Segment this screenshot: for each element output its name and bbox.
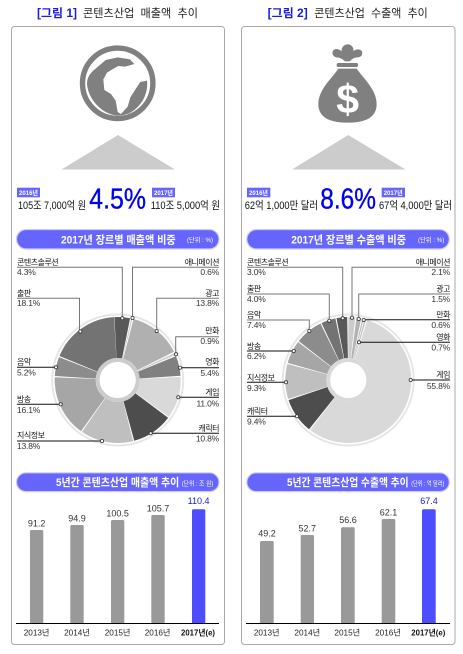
callout: broadcasting (17, 394, 62, 415)
bar chart: five year sales (16, 496, 219, 637)
heading pill: five year exports: 5년간 콘텐츠산업 수출액 추이 (287, 475, 409, 489)
callout: music (17, 356, 58, 378)
stat: 8.6%: 8.6% (320, 183, 376, 215)
callout: film: 0.7% (431, 343, 451, 353)
bar chart: five year sales: 2016년 (145, 627, 170, 637)
heading: figure 1: [그림 1] (37, 7, 77, 20)
heading: figure 1 (37, 7, 198, 20)
badge: 2017 (152, 188, 175, 197)
callout: publishing (17, 288, 82, 333)
callout: knowledge information: 9.3% (247, 383, 266, 393)
badge: 2016: 2016년 (249, 188, 268, 197)
callout: character: 10.8% (196, 433, 220, 443)
bar chart: five year exports: 67.4 (420, 496, 438, 506)
callout: content solution (247, 257, 344, 320)
callout: comics (362, 310, 451, 330)
badge: 2017: 2017년 (154, 188, 173, 197)
callout: film: 영화 (205, 356, 220, 366)
callout: games: 게임 (436, 370, 450, 380)
heading pill: five year exports: (단위 : 억 달러) (411, 478, 444, 487)
callout: broadcasting (247, 341, 295, 361)
callout: animation: 애니메이션 (185, 257, 219, 267)
heading pill: genre sales share: (단위 : %) (187, 235, 213, 244)
bar chart: five year sales: 2013년 (24, 627, 49, 637)
callout: advertising: 광고 (436, 284, 450, 294)
chart: export donut (283, 314, 414, 446)
callout: publishing: 18.1% (17, 298, 41, 308)
callout: animation: 0.6% (200, 267, 220, 277)
bar chart: five year exports: 2014년 (294, 627, 320, 637)
callout: content solution (17, 257, 124, 320)
callout: animation: 애니메이션 (416, 257, 450, 267)
text: 2016 exports: 62억 1,000만 달러 (245, 199, 318, 212)
chart: sales donut (52, 314, 183, 446)
callout: advertising (357, 284, 451, 321)
stat: 4.5%: 4.5% (89, 183, 146, 215)
callout: advertising: 광고 (205, 288, 219, 298)
text: 2016 sales: 105조 7,000억 원 (18, 199, 86, 212)
bar chart: five year sales: 94.9 (68, 514, 86, 524)
icon: money bag: $ (336, 76, 359, 122)
bar chart: five year exports: 49.2 (258, 528, 276, 538)
callout: content solution: 3.0% (247, 267, 266, 277)
heading pill: genre export share: (단위 : %) (418, 235, 444, 244)
bar chart: five year exports: 2013년 (254, 627, 280, 637)
callout: film: 5.4% (200, 368, 220, 378)
heading pill: genre export share (247, 230, 449, 249)
bar chart: five year exports: 62.1 (380, 508, 397, 518)
badge: 2017 (382, 188, 405, 197)
callout: comics: 만화 (436, 310, 451, 319)
icon: money bag (318, 44, 377, 123)
callout: comics (174, 326, 220, 356)
text: 2017 sales: 110조 5,000억 원 (151, 199, 220, 212)
callout: animation (350, 257, 451, 319)
callout: knowledge information (247, 372, 288, 393)
callout: advertising: 1.5% (431, 294, 451, 304)
callout: film: 영화 (436, 332, 451, 342)
callout: advertising (155, 288, 220, 333)
callout: music: 5.2% (17, 368, 36, 378)
bar chart: five year sales: 100.5 (106, 508, 129, 518)
callout: comics: 만화 (205, 326, 220, 336)
callout: broadcasting: 16.1% (17, 405, 41, 415)
badge: 2016 (247, 188, 270, 197)
callout: knowledge information: 13.8% (17, 441, 41, 451)
heading pill: five year exports (247, 473, 449, 492)
callout: publishing (247, 284, 331, 322)
callout: publishing: 출판 (17, 288, 32, 298)
panel: exports (242, 26, 455, 644)
bar chart: five year sales: 91.2 (28, 518, 45, 528)
bar chart: five year exports: 2015년 (334, 627, 360, 637)
callout: publishing: 출판 (247, 284, 262, 294)
callout: character: 캐릭터 (198, 423, 219, 433)
callout: advertising: 13.8% (196, 298, 220, 308)
heading pill: five year sales: (단위 : 조 원) (182, 478, 213, 487)
bar chart: five year sales: 2015년 (105, 627, 130, 637)
callout: music: 음악 (17, 356, 32, 366)
callout: comics: 0.9% (200, 336, 220, 346)
callout: broadcasting: 방송 (17, 394, 31, 404)
heading: figure 2: [그림 2] (268, 7, 308, 20)
heading pill: five year sales: 5년간 콘텐츠산업 매출액 추이 (56, 475, 179, 489)
callout: knowledge information: 지식정보 (247, 372, 275, 382)
arrow: increase triangle (292, 135, 406, 170)
callout: broadcasting: 방송 (247, 341, 261, 351)
badge: 2016 (17, 188, 40, 197)
heading: figure 2: 콘텐츠산업 수출액 추이 (314, 7, 428, 20)
heading pill: genre export share: 2017년 장르별 수출액 비중 (291, 232, 406, 246)
bar chart: five year sales: 2014년 (64, 627, 90, 637)
badge: 2017: 2017년 (384, 188, 403, 197)
bar chart: five year exports: 2016년 (375, 627, 401, 637)
callout: character: 캐릭터 (247, 406, 268, 416)
callout: character: 9.4% (247, 416, 266, 426)
badge: 2016: 2016년 (19, 188, 38, 197)
callout: games (409, 370, 451, 391)
callout: games: 게임 (205, 387, 219, 397)
callout: animation (131, 257, 220, 320)
callout: knowledge information (17, 430, 104, 451)
callout: broadcasting: 6.2% (247, 351, 266, 361)
icon: globe (82, 48, 153, 118)
callout: film (357, 332, 451, 353)
callout: games: 11.0% (197, 398, 220, 408)
callout: knowledge information: 지식정보 (17, 430, 45, 440)
bar chart: five year sales: 105.7 (147, 504, 169, 514)
heading pill: genre sales share: 2017년 장르별 매출액 비중 (61, 232, 176, 246)
bar chart: five year exports (246, 496, 450, 637)
heading pill: genre sales share (16, 230, 219, 249)
bar chart: five year sales: 2017년(e) (181, 627, 215, 637)
callout: content solution: 콘텐츠솔루션 (17, 257, 58, 267)
callout: character (149, 423, 220, 443)
heading: figure 1: 콘텐츠산업 매출액 추이 (83, 7, 198, 20)
callout: games: 55.8% (427, 381, 451, 391)
callout: games (177, 387, 220, 408)
callout: music (247, 309, 311, 333)
callout: animation: 2.1% (431, 267, 451, 277)
bar chart: five year exports: 56.6 (339, 515, 357, 525)
callout: character (247, 406, 299, 426)
heading pill: five year sales (16, 473, 219, 492)
callout: content solution: 콘텐츠솔루션 (247, 257, 288, 267)
callout: music: 음악 (247, 309, 262, 319)
callout: content solution: 4.3% (17, 267, 36, 277)
panel: sales (12, 26, 224, 644)
text: 2017 exports: 67억 4,000만 달러 (379, 199, 452, 212)
callout: film (178, 356, 220, 378)
bar chart: five year sales: 110.4 (188, 496, 210, 506)
callout: publishing: 4.0% (247, 294, 266, 304)
callout: music: 7.4% (247, 320, 266, 330)
bar chart: five year exports: 52.7 (299, 524, 316, 534)
arrow: increase triangle (62, 135, 175, 170)
heading: figure 2 (268, 7, 428, 20)
callout: comics: 0.6% (431, 320, 451, 330)
bar chart: five year exports: 2017년(e) (411, 627, 446, 637)
